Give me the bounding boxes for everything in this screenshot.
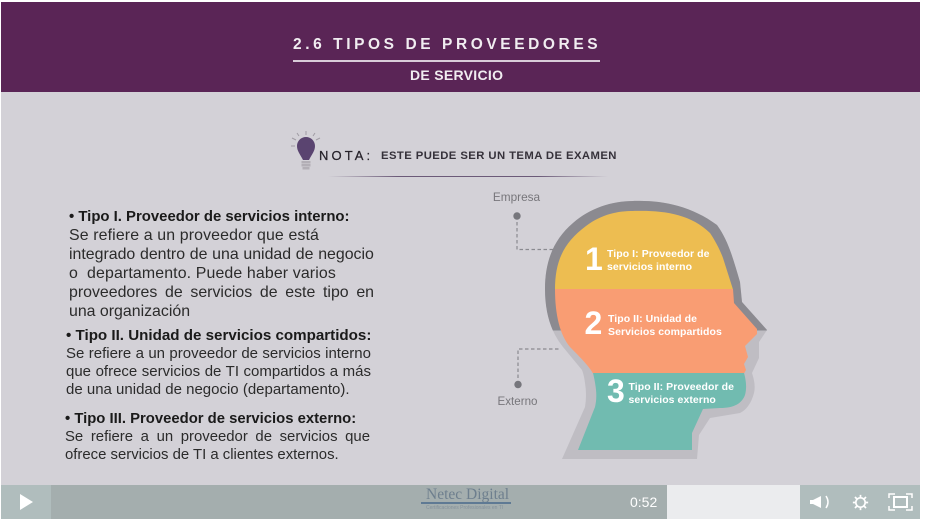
player bar — [1, 485, 920, 519]
text block: Tipo II: Se refiere a un proveedor de servicios interno — [66, 345, 371, 362]
text block: Tipo II: de una unidad de negocio (departamento). — [66, 381, 350, 398]
label 3: 3 — [607, 373, 625, 409]
label 2 — [584, 305, 722, 341]
region 2: orange — [555, 289, 757, 374]
title line 2: DE SERVICIO — [410, 67, 503, 83]
title rule — [293, 60, 600, 62]
note label: NOTA: — [319, 148, 373, 163]
icon: volume — [810, 496, 829, 508]
connector: Externo — [498, 349, 559, 408]
text block: Tipo III: Se refiere a un proveedor de servicios que — [65, 429, 370, 445]
text block: Tipo I: integrado dentro de una unidad de negocio — [69, 246, 374, 263]
note rule — [328, 176, 608, 177]
head diagram — [493, 190, 767, 459]
time: 0:52 — [630, 494, 657, 510]
label 1: Tipo I: Proveedor de — [607, 248, 710, 260]
logo rule — [421, 502, 511, 504]
heading: Tipo III: • Tipo III. Proveedor de servicios externo: — [65, 411, 356, 427]
icon: light bulb — [291, 131, 320, 170]
text block: Tipo I: una organización — [69, 303, 190, 320]
connector: Empresa — [493, 190, 557, 250]
note heading — [291, 131, 617, 177]
icon: settings — [852, 494, 868, 510]
text block: Tipo III: ofrece servicios de TI a clientes externos. — [65, 447, 339, 463]
icon: fullscreen — [888, 493, 913, 511]
label 1: 1 — [585, 241, 603, 277]
text block: Tipo I: o departamento. Puede haber varios — [69, 265, 336, 282]
label 3 — [607, 373, 734, 409]
title line 1: 2.6 TIPOS DE PROVEEDORES — [293, 36, 601, 53]
region 3: teal — [578, 373, 746, 450]
note text: ESTE PUEDE SER UN TEMA DE EXAMEN — [381, 150, 617, 162]
connector: Externo: Externo — [498, 395, 537, 408]
heading: Tipo I: • Tipo I. Proveedor de servicios interno: — [69, 209, 350, 225]
label 3: servicios externo — [628, 394, 716, 406]
label 1 — [585, 241, 710, 277]
progress track — [667, 485, 800, 519]
label 1: servicios interno — [607, 261, 692, 273]
text block: Tipo I: proveedores de servicios de este tipo en — [69, 284, 374, 301]
connector: Empresa: Empresa — [493, 190, 541, 204]
heading: Tipo II: • Tipo II. Unidad de servicios compartidos: — [66, 327, 371, 344]
text block: Tipo I: Se refiere a un proveedor que está — [69, 227, 319, 244]
logo — [421, 486, 511, 511]
label 3: Tipo II: Proveedor de — [628, 381, 734, 393]
text block: Tipo II — [66, 327, 371, 398]
text block: Tipo III — [65, 411, 370, 463]
label 2: 2 — [584, 305, 602, 341]
logo name: Netec Digital — [426, 486, 509, 503]
region 1: yellow — [555, 211, 733, 290]
label 2: Servicios compartidos — [608, 326, 722, 338]
play button — [1, 485, 51, 519]
text block: Tipo II: que ofrece servicios de TI compartidos a más — [66, 363, 371, 380]
icon: play — [20, 494, 33, 510]
controls — [800, 485, 920, 519]
head silhouette: lower light band — [545, 201, 767, 459]
head silhouette: upper dark band — [545, 200, 767, 330]
label 2: Tipo II: Unidad de — [608, 313, 697, 325]
header band — [1, 2, 920, 92]
text block: Tipo I — [69, 209, 374, 320]
logo tagline: Certificaciones Profesionales en TI — [426, 505, 503, 511]
title — [293, 36, 601, 83]
